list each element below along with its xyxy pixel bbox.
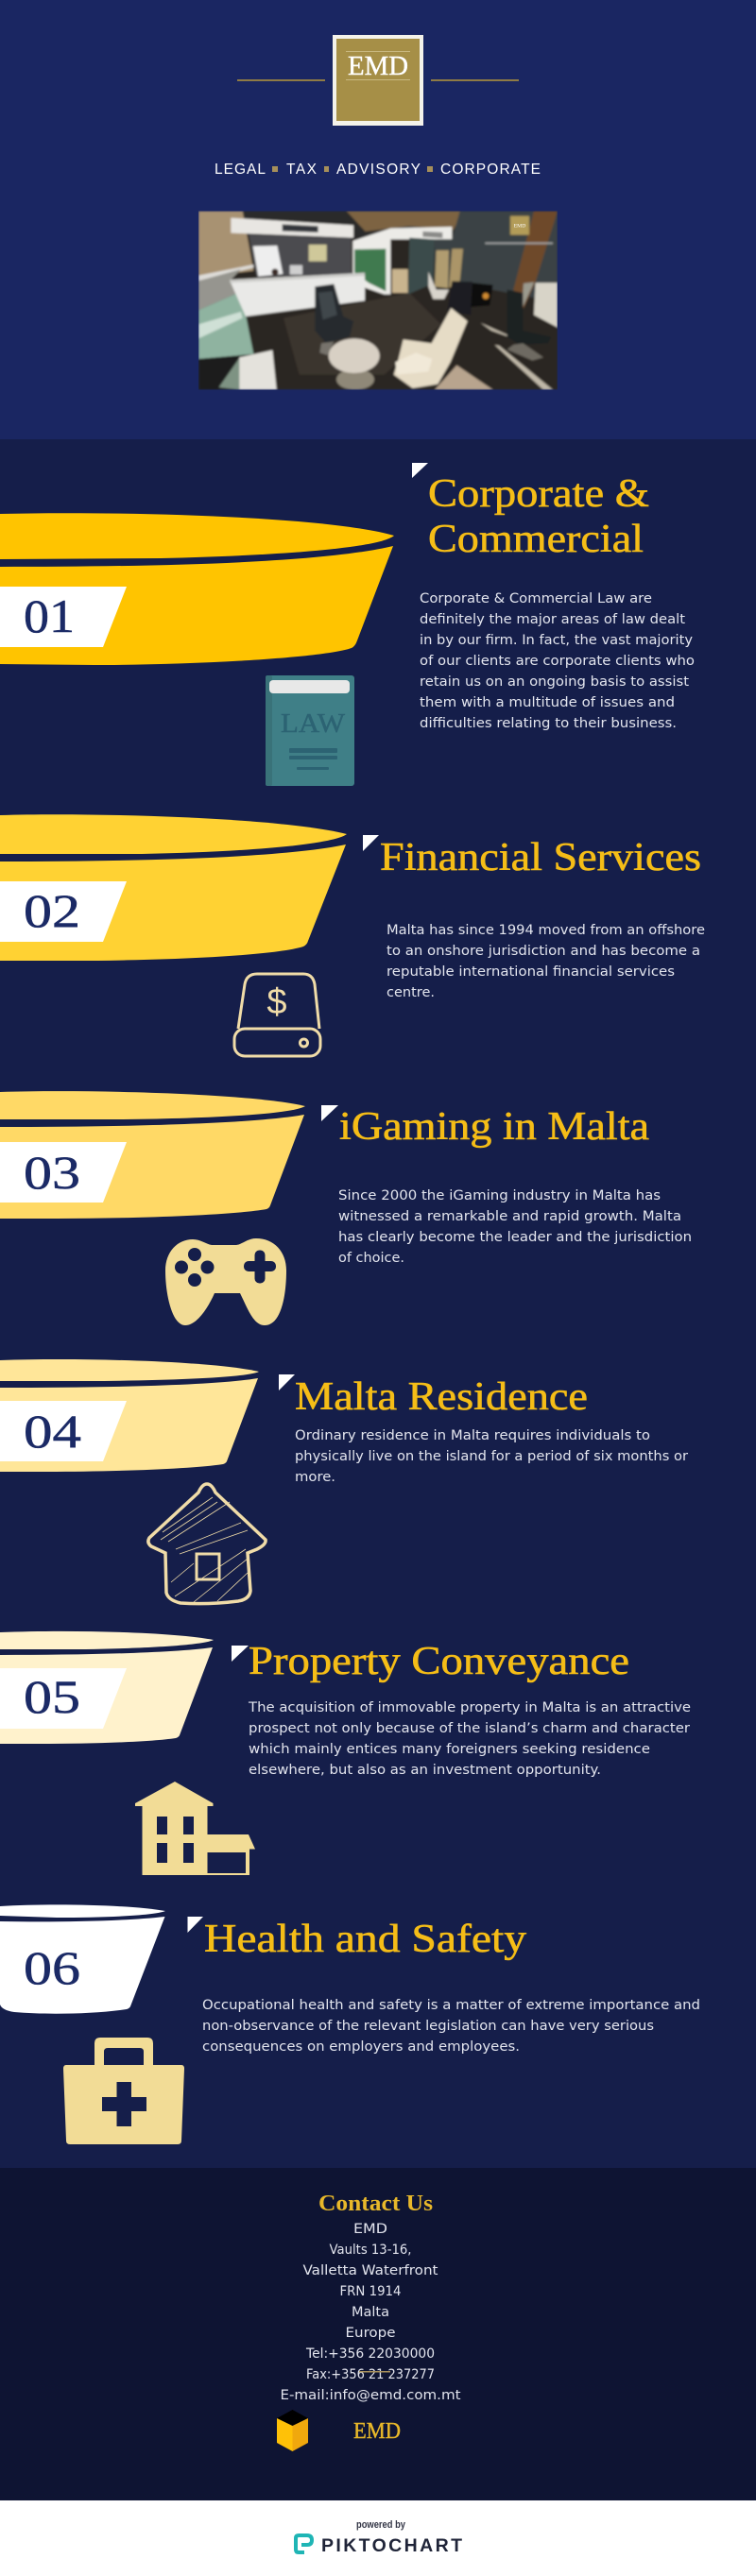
photo: office reception (198, 211, 558, 390)
body text: Occupational health and safety is a matter of extreme importance and (202, 1998, 700, 2013)
EMD wordmark: EMD (353, 2419, 401, 2444)
contact details: Fax:+356 21 237277 (306, 2367, 435, 2382)
funnel bowl 05 (0, 1631, 214, 1744)
section 02: Financial Services (0, 814, 705, 1056)
body text: retain us on an ongoing basis to assist (420, 674, 690, 690)
Piktochart wordmark: PIKTOCHART (321, 2535, 462, 2556)
contact details: FRN 1914 (340, 2284, 401, 2299)
tagline: TAX (286, 162, 318, 178)
icon: building (135, 1782, 255, 1875)
corner marker (412, 463, 428, 478)
body text: has clearly become the leader and the jurisdiction (338, 1230, 692, 1245)
funnel bowl 06 (0, 1904, 165, 2014)
icon: money drive: $ (266, 982, 287, 1022)
funnel bowl 01 (0, 513, 394, 665)
body text: centre. (387, 985, 435, 1000)
section 04: Malta Residence (0, 1359, 688, 1604)
heading (428, 472, 649, 561)
funnel bowl 01: 01 (24, 589, 75, 642)
icon: law book: LAW (281, 708, 346, 739)
icon: Piktochart mark (296, 2535, 312, 2552)
icon: sketched house (148, 1484, 266, 1604)
body text (202, 1998, 700, 2055)
tagline (215, 162, 541, 178)
contact details: E-mail:info@emd.com.mt (280, 2388, 461, 2403)
funnel bowl 03 (0, 1091, 305, 1219)
icon: game controller (165, 1238, 286, 1325)
funnel bowl 05: 05 (24, 1670, 80, 1723)
funnel bowl 04: 04 (24, 1405, 81, 1458)
heading: Health and Safety (204, 1918, 526, 1961)
icon: box (277, 2410, 308, 2451)
heading: Financial Services (380, 836, 701, 879)
contact heading: Contact Us (318, 2192, 433, 2216)
icon: law book (266, 675, 354, 786)
panel: services background (0, 439, 756, 2168)
powered by label: powered by (356, 2519, 406, 2531)
icon: money drive (234, 974, 320, 1056)
body text: elsewhere, but also as an investment opportunity. (249, 1763, 601, 1778)
corner marker (363, 835, 379, 851)
body text: in by our firm. In fact, the vast majority (420, 633, 693, 648)
funnel bowl 06: 06 (24, 1941, 80, 1994)
corner marker (321, 1105, 338, 1121)
heading: Corporate & (428, 472, 649, 516)
contact details: Vaults 13-16, (329, 2243, 412, 2258)
heading: Commercial (428, 518, 644, 561)
heading: iGaming in Malta (339, 1105, 649, 1149)
body text: The acquisition of immovable property in Malta is an attractive (248, 1700, 691, 1715)
panel: powered by (0, 2500, 756, 2576)
section 01: Corporate and Commercial (0, 463, 695, 786)
funnel bowl 04 (0, 1359, 259, 1472)
body text (387, 923, 705, 1000)
contact details: Malta (352, 2305, 389, 2320)
funnel bowl 02 (0, 814, 347, 961)
body text: Ordinary residence in Malta requires individuals to (295, 1428, 650, 1443)
logo: EMD (333, 35, 423, 126)
icon: medical kit (63, 2038, 184, 2144)
body text: reputable international financial services (387, 964, 675, 980)
body text: Since 2000 the iGaming industry in Malta has (338, 1188, 661, 1203)
section 05: Property Conveyance (0, 1631, 691, 1875)
tagline: ADVISORY (336, 162, 421, 178)
body text: them with a multitude of issues and (420, 695, 675, 710)
corner marker (232, 1646, 249, 1662)
tagline: CORPORATE (440, 162, 541, 178)
heading: Property Conveyance (249, 1640, 629, 1683)
contact details: Tel:+356 22030000 (305, 2346, 435, 2362)
logo: EMD: EMD (348, 51, 408, 81)
body text: difficulties relating to their business. (420, 716, 677, 731)
body text (295, 1428, 688, 1485)
body text: consequences on employers and employees. (202, 2039, 520, 2055)
body text: non-observance of the relevant legislation can have very serious (202, 2019, 654, 2034)
heading: Malta Residence (295, 1375, 588, 1419)
contact details: Europe (346, 2326, 396, 2341)
body text: which mainly entices many foreigners seeking residence (249, 1742, 650, 1757)
tagline: LEGAL (215, 162, 266, 178)
corner marker (187, 1917, 203, 1933)
panel: contact footer (0, 2168, 756, 2500)
body text: to an onshore jurisdiction and has become a (387, 944, 700, 959)
corner marker (279, 1374, 295, 1390)
body text: more. (295, 1470, 335, 1485)
body text: Malta has since 1994 moved from an offshore (387, 923, 705, 938)
contact details (280, 2222, 461, 2403)
contact details: Valletta Waterfront (302, 2263, 438, 2278)
body text: of our clients are corporate clients who (420, 654, 695, 669)
section 06: Health and Safety (0, 1904, 700, 2144)
body text: prospect not only because of the island’s charm and character (249, 1721, 690, 1736)
body text: Corporate & Commercial Law are (420, 591, 652, 606)
body text: of choice. (338, 1251, 404, 1266)
panel: header (0, 0, 756, 439)
body text (338, 1188, 692, 1266)
section 03: iGaming in Malta (0, 1091, 692, 1325)
funnel bowl 02: 02 (24, 884, 80, 937)
body text: definitely the major areas of law dealt (420, 612, 686, 627)
body text (420, 591, 695, 731)
funnel bowl 03: 03 (24, 1146, 80, 1199)
body text: witnessed a remarkable and rapid growth. Malta (338, 1209, 681, 1224)
body text: physically live on the island for a period of six months or (295, 1449, 688, 1464)
contact details: EMD (353, 2222, 387, 2237)
photo: office reception: EMD (514, 223, 525, 229)
body text (248, 1700, 691, 1778)
